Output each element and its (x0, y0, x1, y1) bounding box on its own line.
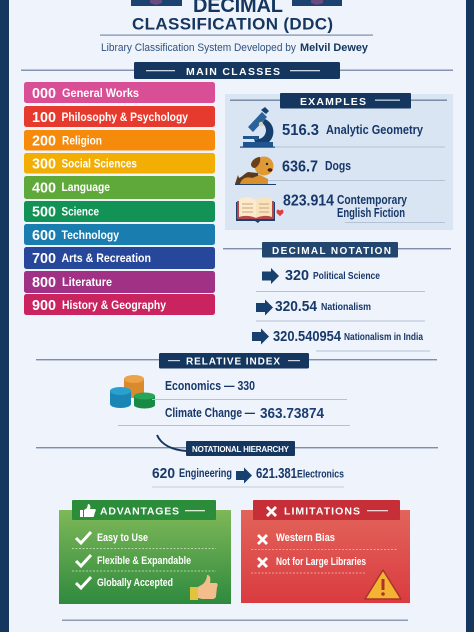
icon: book right (292, 0, 342, 6)
example 636.7: 636.7 (282, 158, 318, 176)
class 800: 800 (32, 274, 56, 291)
list: limitations: Western Bias (276, 532, 335, 544)
example 823.914: Contemporary (337, 193, 407, 207)
icon: book left (131, 0, 182, 6)
arrow (236, 468, 252, 484)
class 900: History & Geography (62, 298, 166, 312)
hierarchy 620: Engineering (179, 468, 232, 480)
heading: advantages: ADVANTAGES (100, 506, 179, 518)
class 500: 500 (32, 204, 56, 220)
example 516.3: 516.3 (282, 122, 319, 139)
subtitle: Library Classification System Developed by (101, 42, 296, 54)
class 300 (24, 153, 215, 174)
right border (466, 0, 474, 632)
icon: check (76, 577, 91, 588)
heading: limitations: LIMITATIONS (284, 506, 360, 518)
heading: examples: EXAMPLES (300, 96, 366, 108)
notation 320.54 (275, 299, 371, 315)
hierarchy 621.381: 621.381 (256, 466, 297, 482)
hierarchy 620 (152, 465, 232, 482)
title (132, 0, 333, 34)
example 823.914: English Fiction (337, 206, 405, 220)
class 100 (24, 106, 215, 127)
list: advantages (72, 532, 216, 589)
class 300: Social Sciences (62, 156, 137, 170)
list: advantages: Easy to Use (97, 532, 148, 544)
heading: main classes: MAIN CLASSES (186, 66, 280, 78)
list: advantages: Globally Accepted (97, 577, 173, 589)
heading: advantages (72, 500, 216, 520)
entry: climate change: Climate Change — (165, 405, 255, 420)
class 800: Literature (62, 275, 112, 289)
class 700: 700 (32, 250, 56, 267)
notation 320: Political Science (313, 270, 380, 282)
class 900 (24, 294, 215, 315)
class 300: 300 (32, 156, 56, 172)
example 516.3: Analytic Geometry (326, 122, 424, 137)
class 500: Science (62, 204, 99, 218)
notation 320.54: 320.54 (275, 299, 317, 315)
panel: examples (225, 93, 453, 230)
list: advantages: Flexible & Expandable (97, 555, 191, 567)
example 516.3 (282, 122, 424, 139)
class 600: 600 (32, 227, 56, 244)
panel: decimal notation (223, 242, 451, 352)
entry: climate change (165, 405, 325, 422)
arrow (252, 328, 269, 344)
icon: open book (236, 197, 284, 223)
heading: notational hierarchy: NOTATIONAL HIERARCHY (192, 445, 290, 454)
notation 320.54: Nationalism (321, 301, 371, 313)
class 700 (24, 247, 215, 269)
heading: examples (280, 93, 411, 108)
heading: decimal notation: DECIMAL NOTATION (272, 246, 391, 257)
class 800 (24, 271, 215, 293)
icon: coins (110, 375, 155, 409)
icon: check (76, 532, 91, 543)
class 200: Religion (62, 134, 102, 148)
heading: decimal notation (262, 242, 398, 258)
icon: dog (235, 156, 276, 185)
class 600: Technology (62, 228, 119, 242)
icon: microscope (240, 107, 275, 148)
class 000 (24, 82, 215, 103)
heading: notational hierarchy (186, 441, 295, 456)
class 400 (24, 176, 215, 199)
heading: relative index (159, 353, 309, 368)
class 900: 900 (32, 297, 56, 314)
notation 320: 320 (285, 268, 309, 284)
panel: relative index (36, 353, 437, 426)
class 400: 400 (32, 180, 56, 196)
heading: main classes (134, 62, 340, 79)
notation 320.540954 (273, 329, 423, 345)
class 200: 200 (32, 132, 56, 150)
icon: cross (258, 535, 267, 544)
entry: economics: Economics — 330 (165, 378, 255, 393)
entry: climate change: 363.73874 (260, 405, 325, 422)
class 700: Arts & Recreation (62, 251, 151, 265)
hierarchy 621.381: Electronics (297, 468, 344, 480)
list: limitations (251, 532, 397, 573)
class 100: 100 (32, 109, 56, 126)
title: CLASSIFICATION (DDC) (132, 14, 333, 34)
class 500 (24, 201, 215, 222)
notation 320.540954: Nationalism in India (344, 332, 423, 343)
notation 320 (285, 268, 380, 284)
panel: advantages (59, 500, 231, 604)
notation 320.540954: 320.540954 (273, 329, 341, 345)
list: limitations: Not for Large Libraries (276, 556, 366, 568)
icon: cross (258, 558, 267, 567)
heading: limitations (253, 500, 400, 520)
arrow (256, 300, 273, 316)
example 636.7: Dogs (325, 158, 351, 173)
example 636.7 (282, 158, 351, 176)
class 600 (24, 224, 215, 245)
class 400: Language (62, 180, 110, 194)
subtitle: Melvil Dewey (300, 42, 369, 54)
class 000: General Works (62, 86, 139, 100)
hierarchy 620: 620 (152, 465, 175, 482)
heading: relative index: RELATIVE INDEX (186, 356, 280, 368)
arrow (262, 268, 279, 284)
icon: thumbs up (190, 575, 218, 600)
icon: check (76, 555, 91, 566)
panel: main classes list (24, 82, 215, 315)
class 000: 000 (32, 85, 56, 102)
class 200 (24, 130, 215, 150)
icon: warning triangle (365, 570, 401, 599)
panel: limitations (241, 500, 410, 603)
left border (0, 0, 9, 632)
class 100: Philosophy & Psychology (62, 110, 188, 124)
example 823.914: 823.914 (283, 192, 334, 210)
connector curve (157, 435, 187, 451)
panel: notational hierarchy (36, 435, 438, 488)
hierarchy 621.381 (256, 466, 344, 482)
example 823.914 (283, 192, 407, 220)
